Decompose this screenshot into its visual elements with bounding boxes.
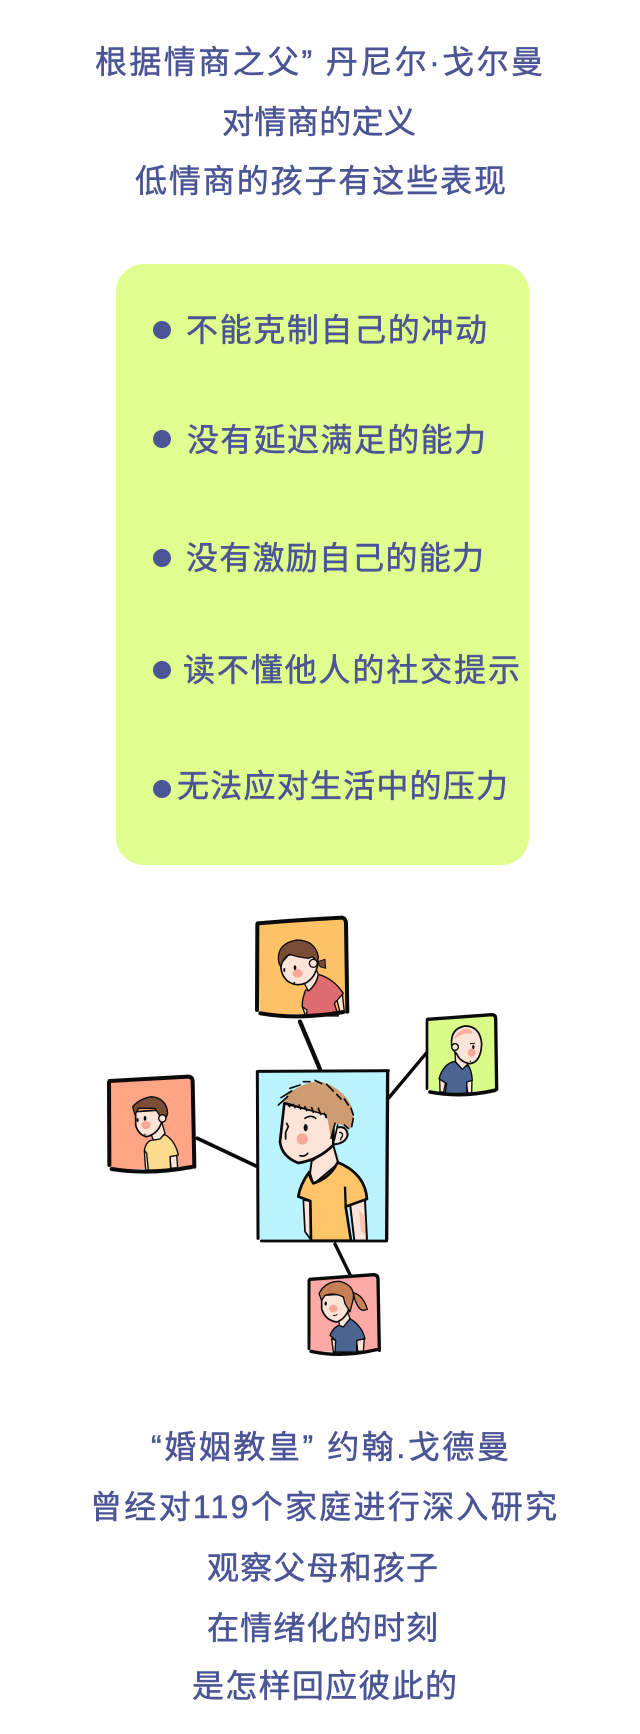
connector lines bbox=[197, 1022, 427, 1276]
portrait: central child on blue bbox=[258, 1072, 387, 1241]
heading: intro text: 对情商的定义 bbox=[222, 104, 416, 140]
neck bbox=[310, 1146, 338, 1184]
list item 5: 无法应对生活中的压力 bbox=[177, 768, 508, 804]
portrait: ponytail girl on pink bbox=[309, 1276, 379, 1352]
text block: Gottman research: 在情绪化的时刻 bbox=[207, 1610, 438, 1646]
portrait: bald man on green bbox=[428, 1016, 496, 1094]
text block: Gottman research: 是怎样回应彼此的 bbox=[192, 1668, 457, 1704]
portrait: girl on orange bbox=[258, 919, 347, 1016]
text block: Gottman research: “婚姻教皇” 约翰.戈德曼 bbox=[151, 1429, 509, 1465]
face bbox=[280, 1103, 333, 1163]
list item 1: 不能克制自己的冲动 bbox=[186, 312, 487, 348]
heading: intro text bbox=[95, 44, 543, 199]
arms bbox=[303, 1200, 310, 1239]
heading: intro text: 低情商的孩子有这些表现 bbox=[135, 163, 506, 199]
text block: Gottman research bbox=[90, 1429, 557, 1704]
illustration: family network bbox=[109, 918, 497, 1354]
eye bbox=[304, 1124, 308, 1131]
frame: girl on orange bbox=[257, 918, 347, 1016]
frame: boy on coral bbox=[109, 1077, 194, 1172]
heading: intro text: 根据情商之父” 丹尼尔·戈尔曼 bbox=[95, 44, 543, 80]
cheek bbox=[297, 1133, 308, 1145]
portrait: boy on coral bbox=[109, 1078, 194, 1170]
panel: low EQ behaviours bbox=[116, 264, 529, 865]
list item 2: 没有延迟满足的能力 bbox=[187, 422, 486, 458]
far eye and features bbox=[286, 1116, 316, 1156]
hair bbox=[279, 1081, 353, 1138]
frame: bald man on green bbox=[427, 1015, 497, 1095]
ear bbox=[334, 1127, 348, 1144]
text block: Gottman research: 观察父母和孩子 bbox=[207, 1550, 438, 1586]
list item 4: 读不懂他人的社交提示 bbox=[183, 652, 520, 688]
t-shirt bbox=[298, 1162, 367, 1241]
list item 3: 没有激励自己的能力 bbox=[186, 540, 484, 576]
frame: ponytail girl bbox=[309, 1275, 379, 1354]
frame: central child bbox=[257, 1071, 388, 1241]
text block: Gottman research: 曾经对119个家庭进行深入研究 bbox=[90, 1489, 557, 1525]
